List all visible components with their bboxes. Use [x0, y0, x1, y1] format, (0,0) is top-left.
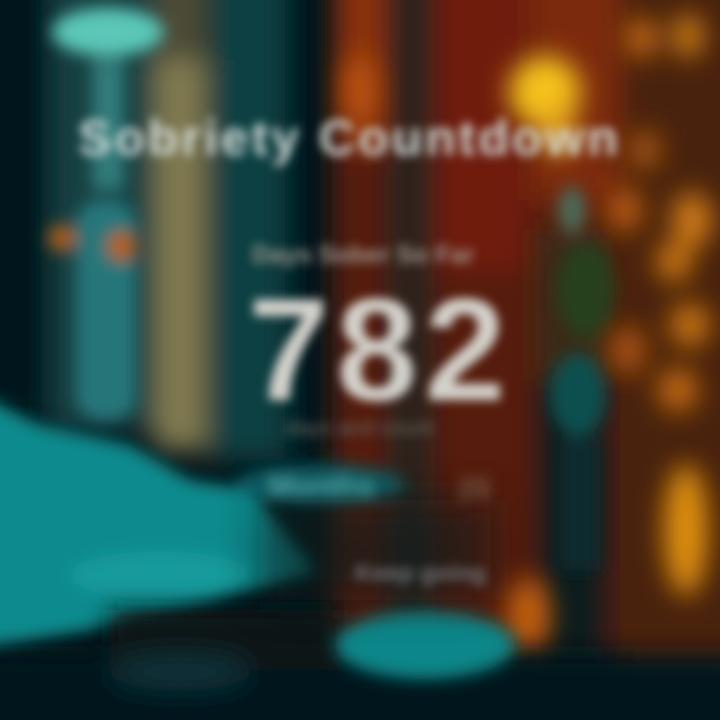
- panel: right red and orange curtains: [332, 0, 720, 690]
- subtitle: Days Sober So Far: [252, 241, 474, 269]
- caption line: days and count: [285, 415, 434, 440]
- big number: 782: [248, 268, 513, 431]
- stat: left: Months: [268, 470, 375, 503]
- footer text: Keep going: [355, 560, 486, 587]
- title: Sobriety Countdown: [78, 110, 621, 166]
- dark scrim behind lower text: [260, 500, 490, 600]
- dark floor: [0, 610, 720, 720]
- panel: left teal and cream curtains: [0, 0, 335, 460]
- icon: left hourglass: [48, 8, 164, 420]
- flame highlights: [344, 14, 712, 653]
- teal disc bottom centre: [335, 611, 515, 679]
- icon: right hourglass: [550, 186, 614, 570]
- stat: right: 25: [458, 472, 491, 505]
- teal fabric bottom left: [0, 395, 405, 650]
